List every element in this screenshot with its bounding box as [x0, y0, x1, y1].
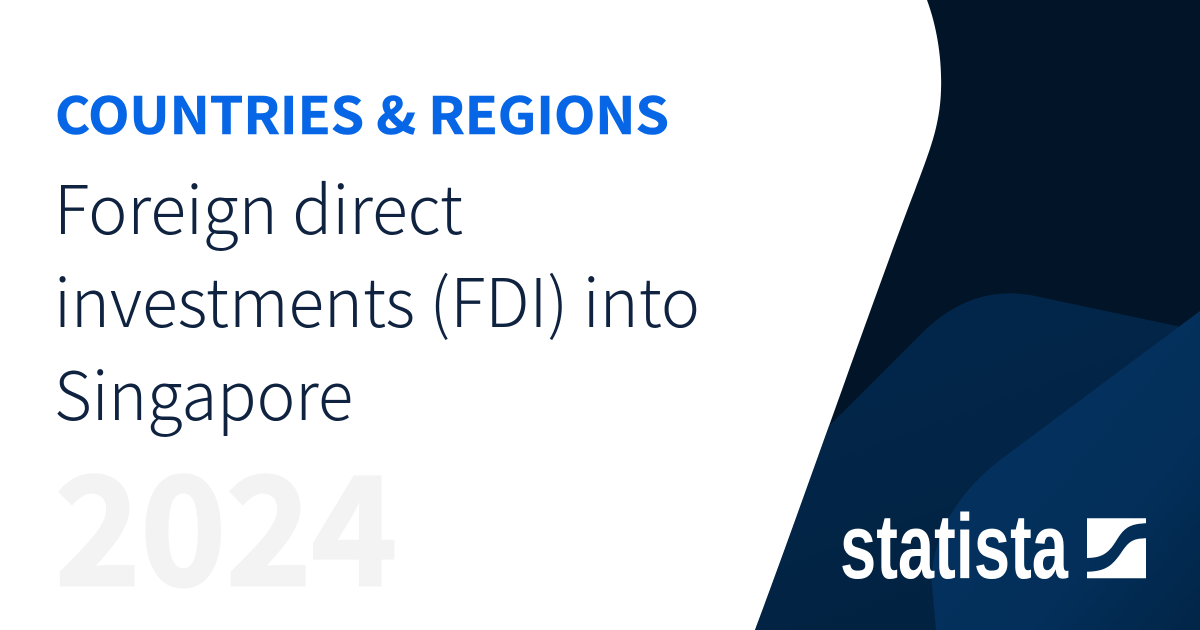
shape: mid-blue rounded overlay [740, 293, 1200, 630]
title: investments (FDI) into [54, 250, 700, 347]
title: Foreign direct [54, 157, 463, 254]
title: Singapore [54, 343, 353, 440]
panel: dark brand background [740, 0, 1200, 630]
category heading: COUNTRIES & REGIONS [55, 75, 669, 149]
logo: statista wordmark: statista [840, 496, 1069, 598]
year watermark: 2024 [55, 412, 397, 629]
title [54, 157, 700, 440]
icon: statista logo mark [1087, 518, 1146, 578]
shape: light-blue rounded overlay [932, 311, 1200, 630]
